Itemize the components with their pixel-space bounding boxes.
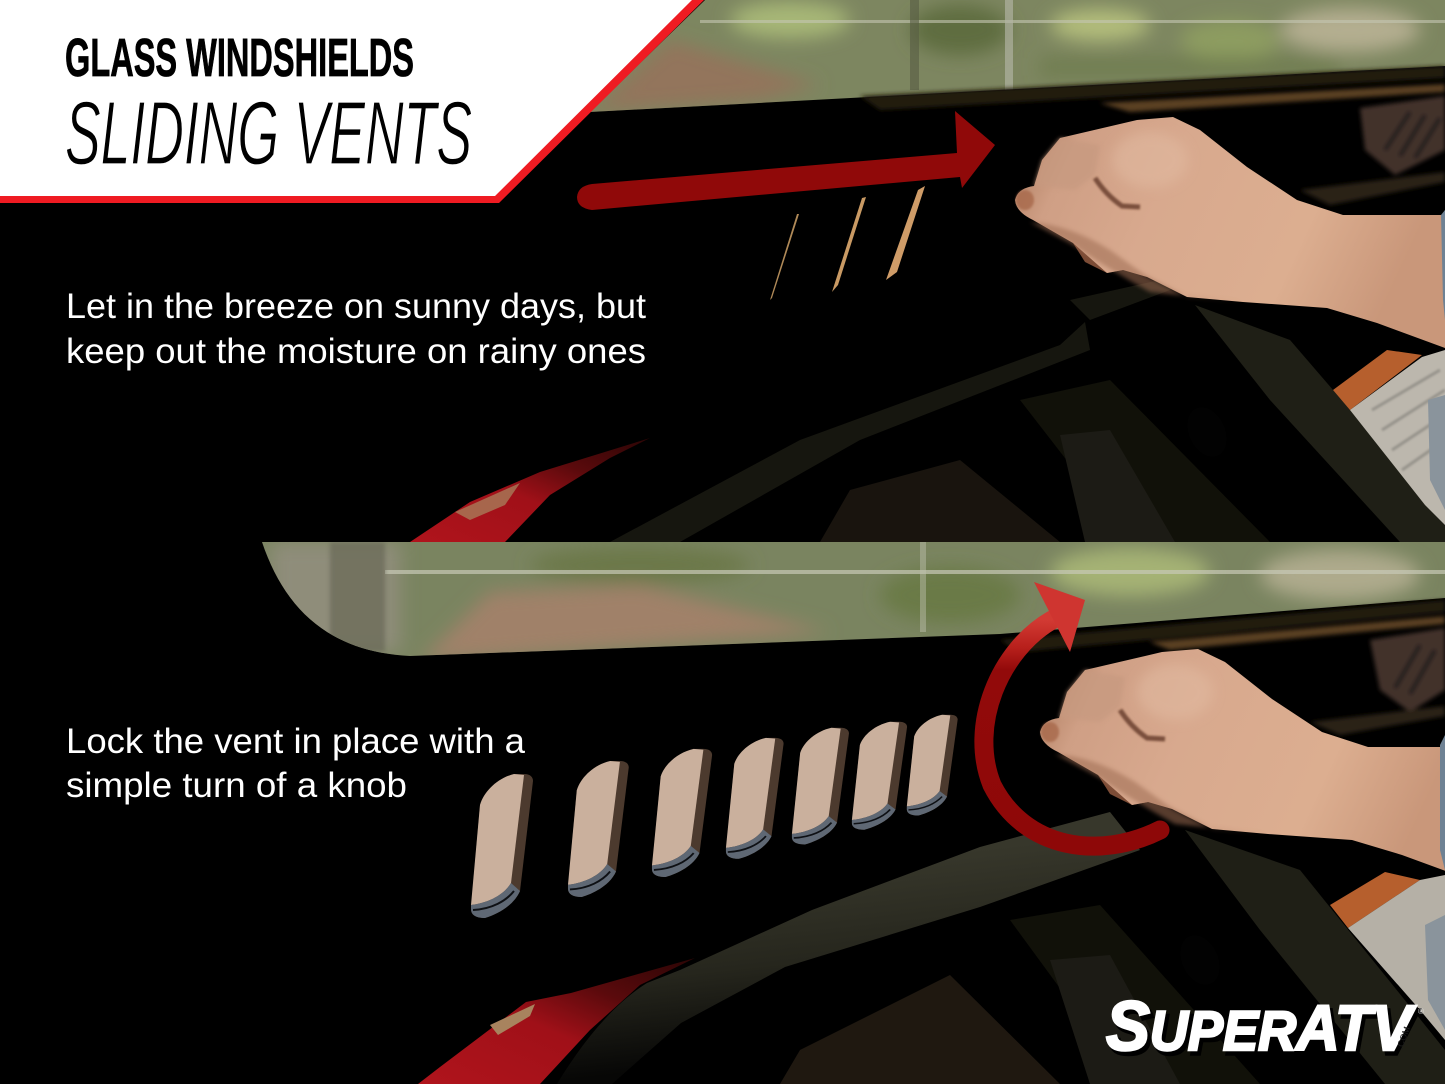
hand turning knob: [1015, 117, 1445, 348]
black cowl band: [557, 812, 1140, 1084]
heading: glass windshields: GLASS WINDSHIELDS: [65, 28, 414, 88]
text block: lock the vent: simple turn of a knob: [66, 766, 407, 805]
logo: SuperATV: ®: [1418, 1007, 1424, 1016]
logo: SuperATV: SUPERATV: [1106, 987, 1417, 1065]
heading: sliding vents: SLIDING VENTS: [65, 84, 472, 184]
text block: breeze and moisture: keep out the moisture on rainy ones: [66, 332, 646, 371]
arrow: turn knob: [984, 582, 1160, 846]
dashboard shapes: [610, 270, 1445, 542]
paper label: [1350, 350, 1445, 525]
window view through windshield: [590, 0, 1445, 112]
text block: breeze and moisture: [66, 287, 646, 371]
vent slots, closed position: [770, 186, 925, 300]
arrow: slide right: [577, 111, 995, 210]
dash top trim streaks: [1000, 600, 1445, 735]
hand turning knob: [1040, 649, 1445, 880]
photo: vent open, bottom panel: [260, 542, 1445, 1084]
red body panel: [418, 958, 695, 1084]
text block: breeze and moisture: Let in the breeze on sunny days, but: [66, 287, 646, 326]
window view with vent open: [260, 542, 1445, 662]
dashboard shapes: [780, 830, 1445, 1084]
vent slots, open position: [471, 715, 958, 918]
title banner: [0, 0, 704, 203]
photo: vent closed, top panel: [410, 0, 1445, 542]
orange warning label: [1333, 350, 1422, 410]
logo: SuperATV: SUPERATV: [1109, 991, 1420, 1069]
logo: SuperATV: .COM: [1394, 1025, 1412, 1051]
dash top trim streaks: [860, 66, 1445, 205]
text block: lock the vent: Lock the vent in place with a: [66, 722, 526, 761]
text block: lock the vent: [66, 722, 526, 805]
red body panel: [410, 438, 650, 542]
